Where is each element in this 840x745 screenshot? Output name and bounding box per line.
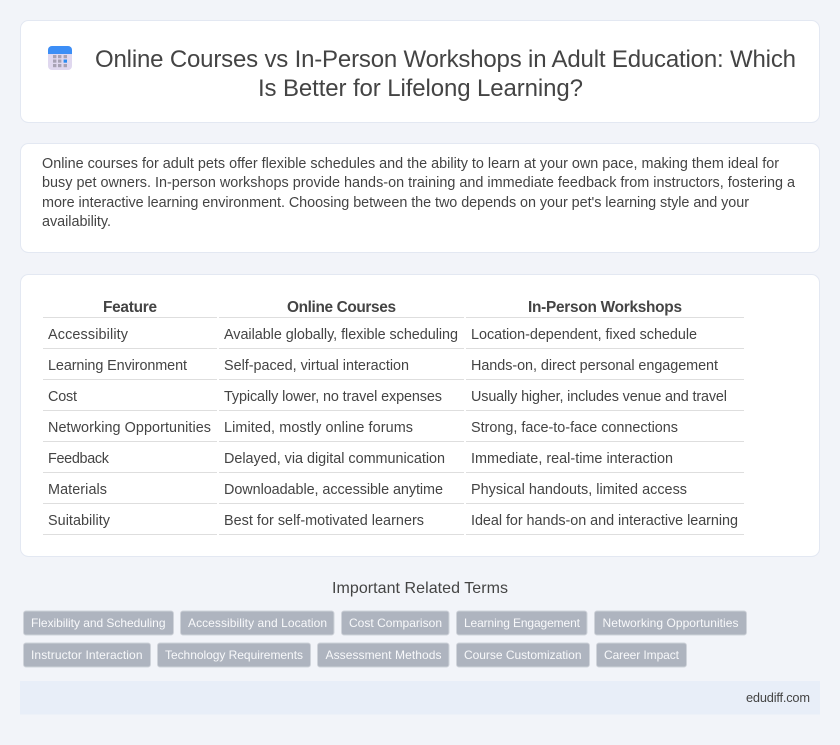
icon: calendar (48, 46, 72, 70)
tag: learning engagement (456, 611, 587, 635)
row: materials: Physical handouts, limited access (471, 482, 687, 498)
tag: course customization: Course Customization (464, 648, 582, 662)
row: accessibility: Location-dependent, fixed schedule (471, 327, 697, 343)
heading: important related terms: Important Related Terms (332, 580, 508, 597)
tag: networking opportunities (594, 611, 746, 635)
row: suitability: Ideal for hands-on and interactive learning (471, 513, 738, 529)
tag: assessment methods (318, 643, 449, 667)
row: accessibility (43, 327, 744, 349)
summary paragraph: more interactive learning environment. Choosing between the two depends on your pet's learning style and your (42, 195, 749, 211)
panel: summary text (20, 144, 820, 252)
table header row: Online Courses (287, 299, 396, 316)
tag: technology requirements (158, 643, 310, 667)
summary paragraph: Online courses for adult pets offer flexible schedules and the ability to learn at your own pace, making them ideal for (42, 156, 779, 172)
tag group: related terms (24, 611, 746, 667)
tag: accessibility and location: Accessibility and Location (188, 616, 327, 630)
tag: technology requirements: Technology Requirements (165, 648, 303, 662)
tag: learning engagement: Learning Engagement (464, 616, 581, 630)
row: cost (43, 389, 744, 411)
summary paragraph: busy pet owners. In-person workshops provide hands-on training and immediate feedback from instructors, fostering a (42, 175, 795, 191)
tag: flexibility and scheduling (24, 611, 174, 635)
row: materials: Downloadable, accessible anytime (224, 482, 443, 498)
row: networking opportunities (43, 420, 744, 442)
tag: instructor interaction: Instructor Interaction (31, 648, 142, 662)
footer (20, 681, 820, 714)
row: suitability: Best for self-motivated learners (224, 513, 424, 529)
tag: instructor interaction (24, 643, 150, 667)
row: networking opportunities: Limited, mostly online forums (224, 420, 413, 436)
tag: cost comparison: Cost Comparison (349, 616, 442, 630)
row: feedback: Feedback (48, 451, 110, 467)
row: feedback: Delayed, via digital communication (224, 451, 445, 467)
table header row (43, 299, 744, 318)
tag: cost comparison (342, 611, 449, 635)
row: feedback (43, 451, 744, 473)
row: materials (43, 482, 744, 504)
row: suitability (43, 513, 744, 535)
row: feedback: Immediate, real-time interaction (471, 451, 673, 467)
row: learning environment: Self-paced, virtual interaction (224, 358, 409, 374)
row: accessibility: Accessibility (48, 327, 129, 343)
panel: header (20, 20, 820, 122)
row: cost: Usually higher, includes venue and travel (471, 389, 727, 405)
summary paragraph (42, 156, 795, 230)
row: networking opportunities: Networking Opportunities (48, 420, 211, 436)
tag: accessibility and location (180, 611, 334, 635)
row: cost: Typically lower, no travel expenses (224, 389, 442, 405)
row: learning environment (43, 358, 744, 380)
tag: assessment methods: Assessment Methods (326, 648, 442, 662)
row: learning environment: Hands-on, direct personal engagement (471, 358, 718, 374)
tag: career impact (596, 643, 686, 667)
table header row: In-Person Workshops (528, 299, 682, 316)
row: cost: Cost (48, 389, 77, 405)
title: Is Better for Lifelong Learning? (258, 75, 583, 102)
tag: flexibility and scheduling: Flexibility and Scheduling (31, 616, 166, 630)
summary paragraph: availability. (42, 214, 111, 230)
row: suitability: Suitability (48, 513, 111, 529)
row: learning environment: Learning Environment (48, 358, 187, 374)
tag: career impact: Career Impact (604, 648, 680, 662)
tag: networking opportunities: Networking Opportunities (602, 616, 738, 630)
title: Online Courses vs In-Person Workshops in Adult Education: Which (95, 46, 796, 73)
footer: edudiff.com (746, 690, 810, 705)
row: accessibility: Available globally, flexible scheduling (224, 327, 458, 343)
row: materials: Materials (48, 482, 107, 498)
table header row: Feature (103, 299, 157, 316)
tag: course customization (456, 643, 590, 667)
title (95, 46, 796, 102)
row: networking opportunities: Strong, face-to-face connections (471, 420, 678, 436)
panel: comparison table (20, 274, 820, 556)
